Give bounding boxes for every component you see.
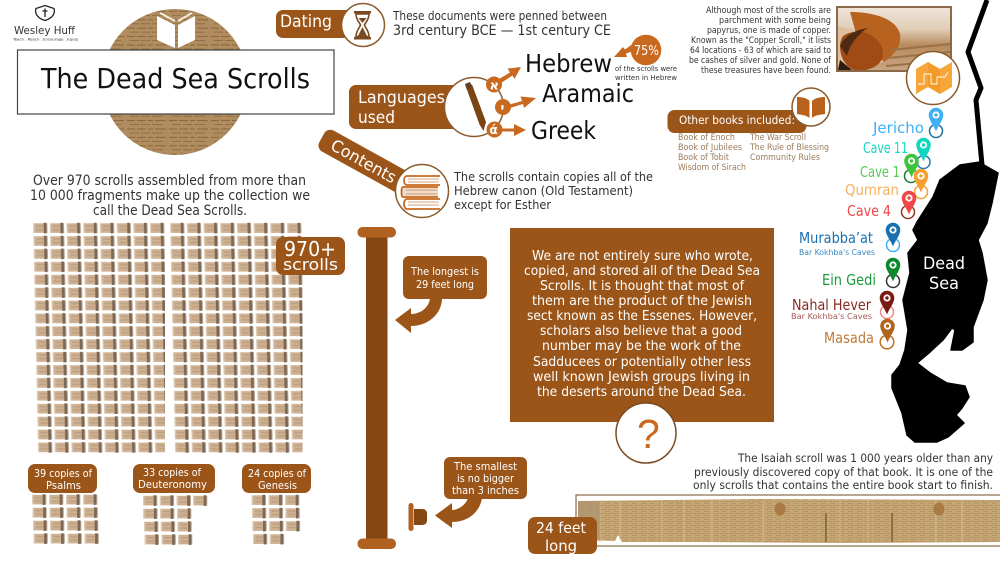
copper scroll text: Although most of the scrolls are <box>706 6 831 16</box>
list: other books column 2: Community Rules <box>750 152 820 162</box>
list: other books column 1 <box>678 132 746 172</box>
Genesis group <box>242 464 311 544</box>
Dating section <box>276 4 611 46</box>
location: Masada: Masada <box>824 329 874 347</box>
copper scroll text <box>689 6 832 76</box>
parchment circle with book <box>102 9 248 155</box>
location: Cave 11: Cave 11 <box>863 139 908 157</box>
word: Hebrew: Hebrew <box>525 49 612 78</box>
contents text: The scrolls contain copies all of the <box>453 169 653 184</box>
Other books section <box>668 88 830 172</box>
label: Genesis <box>242 464 311 493</box>
icon: open white book <box>157 13 195 48</box>
location: Cave 4 <box>847 191 916 220</box>
copper scroll text: parchment with some being <box>719 16 831 26</box>
word: Greek: Greek <box>531 116 596 145</box>
location: Ein Gedi <box>822 258 900 289</box>
icon: question mark <box>616 403 676 463</box>
map: Jordan river and Dead Sea <box>892 0 998 442</box>
list: other books column 1: Book of Jubilees <box>678 142 742 152</box>
list: other books column 1: Book of Tobit <box>678 152 730 162</box>
scroll icons: Psalms <box>32 494 99 544</box>
label: Other books included: Other books included: <box>679 114 795 127</box>
label: Languages used: used <box>358 108 395 127</box>
icon: question mark: ? <box>637 411 660 457</box>
logo: Wesley Huff: Wesley Huff <box>14 24 75 37</box>
callout: the longest: The longest is <box>410 266 479 278</box>
scroll icon grid: 970+ scrolls <box>32 222 302 454</box>
label: Contents (rotated) <box>316 127 412 195</box>
label: Contents (rotated): Contents <box>327 136 400 187</box>
contents text <box>453 169 653 212</box>
label: Psalms <box>28 464 97 493</box>
callout: the longest <box>395 256 487 333</box>
letter: alpha <box>486 122 502 138</box>
label: Deuteronomy <box>133 464 215 493</box>
Contents section <box>316 127 653 218</box>
photo: Isaiah scroll <box>576 495 1000 546</box>
badge: 970+ scrolls <box>276 237 345 275</box>
location: Cave 1 <box>860 154 919 182</box>
location: Jericho <box>872 108 943 138</box>
location: Murabba'at <box>799 223 900 257</box>
location: Nahal Hever: Nahal Hever <box>792 296 872 314</box>
panel: authorship: well known Jewish groups living in <box>533 370 750 385</box>
Isaiah scroll text <box>693 451 993 492</box>
icon: shield with cross <box>36 6 54 20</box>
intro text <box>30 173 310 219</box>
badge: 24 feet long <box>528 517 597 555</box>
callout: the longest: 29 feet long <box>416 279 474 291</box>
callout: the smallest: is no bigger <box>457 474 515 485</box>
label: Languages used: Languages <box>358 88 445 107</box>
arrow: to small scroll <box>435 498 482 528</box>
callout: the smallest: The smallest <box>453 462 517 473</box>
icon: open book <box>792 88 830 126</box>
intro text: call the Dead Sea Scrolls. <box>93 203 247 219</box>
arrow: to Hebrew <box>499 67 521 83</box>
panel: authorship: Sadducees or potentially other less <box>533 355 751 370</box>
panel: authorship: Scrolls. It is thought that most of <box>540 279 744 294</box>
list: other books column 2: The War Scroll <box>749 132 806 142</box>
small scroll <box>408 503 427 531</box>
photo: copper scroll <box>837 7 951 71</box>
icon: treasure map <box>906 52 960 104</box>
location: Jericho: Jericho <box>872 119 924 137</box>
panel: authorship: number may be the work of the <box>542 339 741 354</box>
list: other books column 2 <box>749 132 829 162</box>
list: other books column 1: Book of Enoch <box>678 132 735 142</box>
panel: authorship <box>510 228 774 463</box>
location: Qumran: Qumran <box>845 181 899 199</box>
label: Genesis: Genesis <box>258 479 297 492</box>
panel: authorship: We are not entirely sure who wrote, <box>532 249 753 264</box>
callout: the smallest <box>435 457 527 528</box>
Dead Sea shape <box>892 162 998 442</box>
label: Deuteronomy: 33 copies of <box>143 466 201 479</box>
panel: authorship: the deserts around the Dead Sea. <box>537 385 746 400</box>
letter: yod: י <box>500 101 504 116</box>
Psalms group <box>28 464 99 544</box>
location: Cave 1: Cave 1 <box>860 163 900 181</box>
list: other books column 1: Wisdom of Sirach <box>678 162 746 172</box>
river <box>968 0 987 165</box>
location: Ein Gedi: Ein Gedi <box>822 271 876 289</box>
icon: hourglass <box>342 4 384 46</box>
dating text: 3rd century BCE — 1st century CE <box>393 23 611 39</box>
label: Languages used <box>349 85 474 129</box>
copper scroll text: papyrus, one is made of copper. <box>707 26 831 36</box>
location: Murabba'at: Bar Kokhba's Caves <box>799 248 875 257</box>
icon: pen <box>444 78 504 136</box>
copper scroll text: Known as the "Copper Scroll," it lists <box>691 36 831 46</box>
location: Nahal Hever <box>791 291 894 321</box>
label: Psalms: 39 copies of <box>34 467 92 480</box>
callout: 75% Hebrew <box>614 35 677 82</box>
scroll icons: Deuteronomy <box>143 495 207 545</box>
location: Masada <box>824 319 895 349</box>
label: Dating <box>276 10 356 38</box>
logo: Wesley Huff: Teach . Reach . Encourage . Equip <box>12 38 79 42</box>
intro text: Over 970 scrolls assembled from more than <box>33 173 306 189</box>
title box <box>18 50 334 114</box>
dating text <box>392 9 611 39</box>
dating text: These documents were penned between <box>392 9 607 23</box>
label: Dead Sea: Dead <box>923 254 965 273</box>
badge: 24 feet long: long <box>545 537 577 555</box>
copper scroll text: be cashes of silver and gold. None of <box>689 56 832 66</box>
contents text: Hebrew canon (Old Testament) <box>454 183 633 198</box>
label: Dead Sea <box>923 254 965 293</box>
arrow: to tall scroll <box>395 298 442 333</box>
icon: stack of books <box>396 164 448 218</box>
scroll icons: Genesis <box>252 495 300 544</box>
label: Dead Sea: Sea <box>929 274 959 293</box>
arrow: to Aramaic <box>508 96 536 108</box>
badge: 970+ scrolls: 970+ <box>284 237 336 261</box>
copper scroll text: 64 locations - 63 of which are said to <box>690 46 831 56</box>
panel: authorship: them are the product of the Jewish <box>532 294 752 309</box>
logo: Wesley Huff <box>12 6 79 42</box>
label: Dating: Dating <box>280 12 332 32</box>
panel: authorship: copied, and stored all of the Dead Sea <box>524 264 760 279</box>
title box: The Dead Sea Scrolls <box>40 62 310 95</box>
callout: 75% Hebrew: of the scrolls were <box>615 64 677 73</box>
location: Nahal Hever: Bar Kokhba's Caves <box>791 312 872 321</box>
callout: the smallest: than 3 inches <box>452 486 519 497</box>
contents text: except for Esther <box>454 197 552 212</box>
tall scroll length bar <box>358 227 396 549</box>
Languages section <box>349 35 677 145</box>
letter: aleph: א <box>490 78 499 94</box>
label: Psalms: Psalms <box>46 479 81 492</box>
location: Murabba'at: Murabba’at <box>799 229 873 247</box>
letter: yod <box>495 99 511 116</box>
letter: alpha: ά <box>490 123 498 137</box>
intro text: 10 000 fragments make up the collection we <box>30 188 310 204</box>
location: Cave 11 <box>863 138 931 168</box>
badge: 970+ scrolls: scrolls <box>283 255 338 274</box>
letter: aleph <box>486 76 502 94</box>
label: Genesis: 24 copies of <box>248 467 306 480</box>
callout: 75% Hebrew: written in Hebrew <box>615 73 677 82</box>
callout: 75% Hebrew: 75% <box>634 44 659 59</box>
label: Deuteronomy: Deuteronomy <box>138 478 208 491</box>
location: Cave 4: Cave 4 <box>847 202 891 220</box>
arrow: to Greek <box>500 124 526 136</box>
word: Aramaic: Aramaic <box>542 79 634 108</box>
label: Other books included <box>668 110 806 133</box>
panel: authorship: sect known as the Essenes. However, <box>527 309 757 324</box>
badge: 24 feet long: 24 feet <box>536 519 586 537</box>
location: Qumran <box>845 169 928 199</box>
Deuteronomy group <box>133 464 215 545</box>
panel: authorship: scholars also believe that a good <box>540 324 742 339</box>
copper scroll text: these treasures have been found. <box>701 66 831 76</box>
list: other books column 2: The Rule of Blessing <box>749 142 829 152</box>
